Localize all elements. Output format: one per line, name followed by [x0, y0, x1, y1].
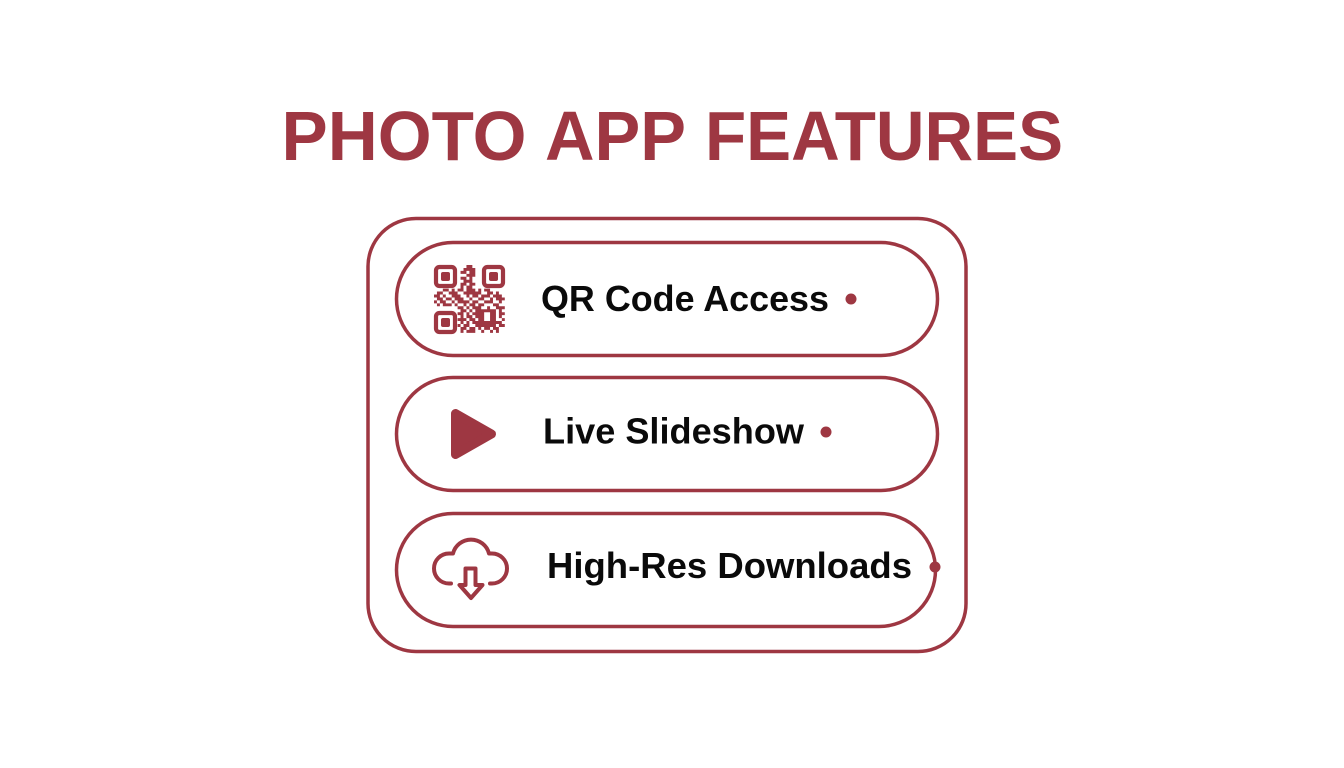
label: High-Res Downloads: High-Res Downloads [547, 545, 912, 586]
marker dot [820, 426, 832, 438]
feature row: Live Slideshow [396, 378, 938, 490]
title [282, 97, 1063, 175]
feature row: High-Res Downloads [396, 514, 940, 626]
title: FEATURES [705, 97, 1063, 175]
marker dot [930, 562, 940, 572]
title: PHOTO [282, 97, 526, 175]
label: QR Code Access: QR Code Access [541, 278, 829, 319]
marker dot [846, 294, 856, 304]
title: APP [545, 97, 686, 175]
feature row: QR Code Access [396, 242, 938, 356]
icon: cloud download [434, 540, 507, 598]
icon: QR code [434, 266, 505, 332]
panel: feature list container [368, 218, 966, 652]
label: Live Slideshow: Live Slideshow [543, 410, 805, 452]
icon: play triangle [456, 414, 492, 454]
